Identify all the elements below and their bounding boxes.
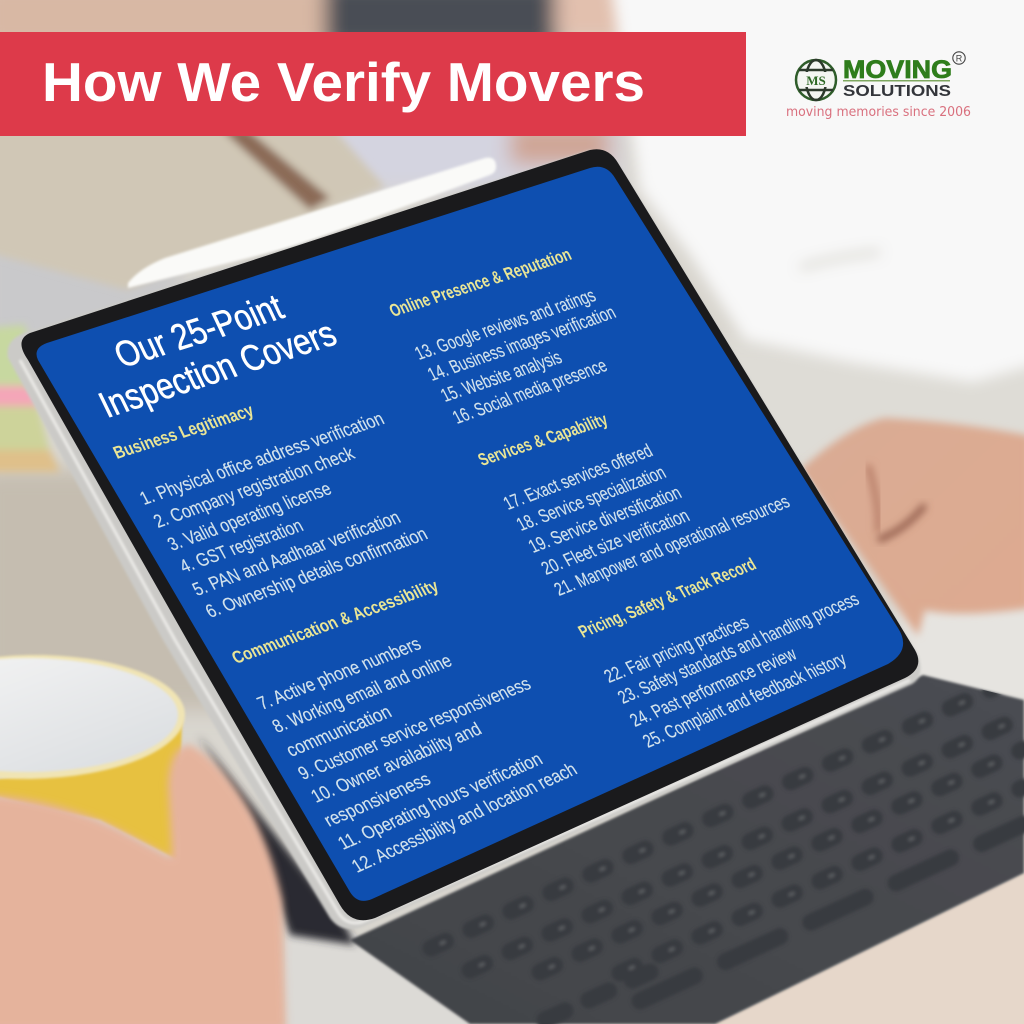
section: communication and accessibility: 7. Active phone numbers: [254, 634, 425, 714]
section: communication and accessibility: 10. Owner availability and: [308, 719, 486, 807]
section: pricing, safety and track record: 22. Fair pricing practices: [601, 613, 753, 687]
white paper stack: [610, 0, 1024, 382]
registered mark: R: [956, 54, 963, 64]
section: business legitimacy: 6. Ownership details confirmation: [202, 524, 431, 622]
section: communication and accessibility: communication: [283, 702, 396, 761]
section: pricing, safety and track record: 24. Past performance review: [626, 644, 801, 731]
shadow behind tablet: [198, 735, 355, 945]
section: communication and accessibility: 12. Accessibility and location reach: [348, 760, 581, 877]
right hand: [800, 418, 1024, 636]
section: online presence and reputation: 16. Social media presence: [449, 356, 611, 428]
left hand holding cup: [0, 745, 286, 1024]
key glyph marks: [439, 700, 1006, 971]
section: online presence and reputation: 14. Business images verification: [424, 303, 620, 385]
section: business legitimacy: 5. PAN and Aadhaar verification: [189, 508, 404, 600]
banner title: How We Verify Movers: [42, 51, 645, 113]
screen text: [92, 244, 863, 877]
section: business legitimacy: Business Legitimacy: [110, 400, 257, 463]
tablet bezel: [21, 149, 918, 920]
silver highlight: [20, 360, 910, 923]
icon: globe MS: MS: [806, 73, 826, 88]
logo wordmark: MOVING: [843, 56, 952, 84]
desk lower left: [285, 925, 480, 1024]
logo: Moving Solutions: SOLUTIONS: [843, 83, 951, 100]
section: services and capability: 18. Service specialization: [513, 463, 670, 535]
section: communication and accessibility: Communication & Accessibility: [228, 576, 442, 668]
section: communication and accessibility: 11. Operating hours verification: [334, 749, 547, 854]
section: online presence and reputation: 15. Website analysis: [438, 348, 566, 406]
tablet: [7, 149, 920, 929]
registered mark: [953, 52, 965, 64]
screen title: Our 25-Point: [107, 286, 290, 375]
section: communication and accessibility: 9. Customer service responsiveness: [295, 674, 535, 784]
section: business legitimacy: 4. GST registration: [176, 516, 307, 577]
section: pricing, safety and track record: 25. Complaint and feedback history: [639, 649, 851, 752]
keyboard: [350, 674, 1024, 1024]
section: business legitimacy: [110, 400, 431, 622]
section: services and capability: 17. Exact services offered: [500, 441, 657, 514]
section: services and capability: Services & Capability: [475, 410, 611, 470]
section: online presence and reputation: Online Presence & Reputation: [386, 244, 575, 321]
section: pricing, safety and track record: 23. Safety standards and handling process: [614, 590, 863, 708]
section: pricing, safety and track record: [575, 554, 863, 752]
section: communication and accessibility: responsiveness: [320, 769, 435, 831]
stylus pencil: [128, 158, 496, 288]
section: services and capability: 20. Fleet size verification: [538, 506, 693, 579]
icon: globe MS: [796, 60, 836, 100]
section: pricing, safety and track record: Pricing, Safety & Track Record: [575, 554, 760, 641]
tablet blue screen: [36, 167, 903, 901]
section: services and capability: 21. Manpower and operational resources: [551, 492, 794, 600]
section: business legitimacy: 2. Company registration check: [150, 444, 359, 532]
section: online presence and reputation: [386, 244, 620, 428]
section: online presence and reputation: 13. Google reviews and ratings: [412, 286, 600, 364]
section: business legitimacy: 3. Valid operating license: [164, 479, 335, 555]
section: business legitimacy: 1. Physical office address verification: [137, 409, 388, 509]
section: communication and accessibility: [228, 576, 581, 877]
beige notebook: [0, 130, 385, 290]
logo: Moving Solutions: [786, 52, 971, 120]
yellow coffee cup: [0, 652, 186, 860]
screen title: Inspection Covers: [92, 312, 343, 425]
desk lower right: [715, 873, 1024, 1024]
sticky notes: [0, 325, 60, 472]
red title banner: [0, 32, 746, 136]
logo tagline: moving memories since 2006: [786, 104, 971, 120]
keyboard keys: [431, 674, 1024, 1020]
section: services and capability: 19. Service diversification: [525, 483, 685, 557]
section: services and capability: [475, 410, 794, 600]
tablet silver frame: [7, 150, 920, 929]
section: communication and accessibility: 8. Working email and online: [269, 651, 456, 737]
